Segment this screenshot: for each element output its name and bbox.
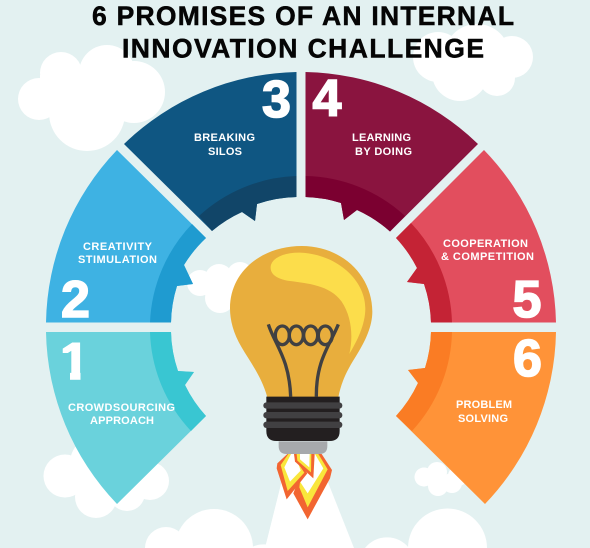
label: problem solving: SOLVING: [458, 413, 508, 425]
rocket exhaust trail: [265, 452, 354, 548]
segment 4: learning by doing: [306, 70, 478, 232]
title: INNOVATION CHALLENGE: [122, 34, 484, 64]
flames: [277, 454, 332, 519]
number 6: 6: [513, 330, 542, 388]
label: crowdsourcing approach: CROWDSOURCING: [68, 402, 175, 414]
number 1: 1: [60, 333, 89, 391]
segment 5: cooperation and competition: [396, 150, 556, 329]
label: cooperation and competition: [441, 238, 534, 263]
segment 2: creativity stimulation: [46, 150, 206, 329]
label: creativity stimulation: STIMULATION: [78, 254, 157, 266]
cloud: lower left: [44, 436, 169, 518]
label: creativity stimulation: CREATIVITY: [83, 241, 153, 253]
screw base: [263, 397, 342, 441]
segment 1: crowdsourcing approach: [46, 332, 206, 504]
label: crowdsourcing approach: APPROACH: [90, 415, 154, 427]
number 3: 3: [262, 71, 291, 129]
filament: [268, 324, 338, 397]
cloud: lower right small: [414, 462, 468, 496]
label: crowdsourcing approach: [68, 402, 175, 427]
label: breaking silos: [194, 132, 255, 158]
number 2: 2: [61, 271, 90, 329]
label: problem solving: [456, 399, 512, 425]
label: breaking silos: BREAKING: [194, 132, 255, 144]
label: problem solving: PROBLEM: [456, 399, 512, 411]
cloud: top right: [413, 24, 533, 101]
label: cooperation and competition: & COMPETITION: [441, 251, 534, 263]
label: creativity stimulation: [78, 241, 157, 266]
label: learning by doing: [352, 132, 412, 158]
label: cooperation and competition: COOPERATION: [443, 238, 528, 250]
title: [92, 1, 514, 64]
clouds: bottom edge: [145, 508, 487, 548]
label: breaking silos: SILOS: [208, 146, 242, 158]
title: 6 PROMISES OF AN INTERNAL: [92, 1, 514, 31]
segment 6: problem solving: [396, 330, 556, 504]
base cap: [279, 441, 327, 454]
label: learning by doing: LEARNING: [352, 132, 411, 144]
bulb highlight: [271, 253, 365, 354]
bulb glass: [230, 246, 372, 397]
light bulb rocket: [230, 246, 372, 519]
cloud: behind bulb: [187, 262, 253, 313]
number 5: 5: [513, 271, 541, 329]
label: learning by doing: BY DOING: [355, 146, 412, 158]
number 4: 4: [313, 70, 342, 128]
segment 3: breaking silos: [124, 71, 296, 231]
cloud: top left: [18, 45, 165, 151]
